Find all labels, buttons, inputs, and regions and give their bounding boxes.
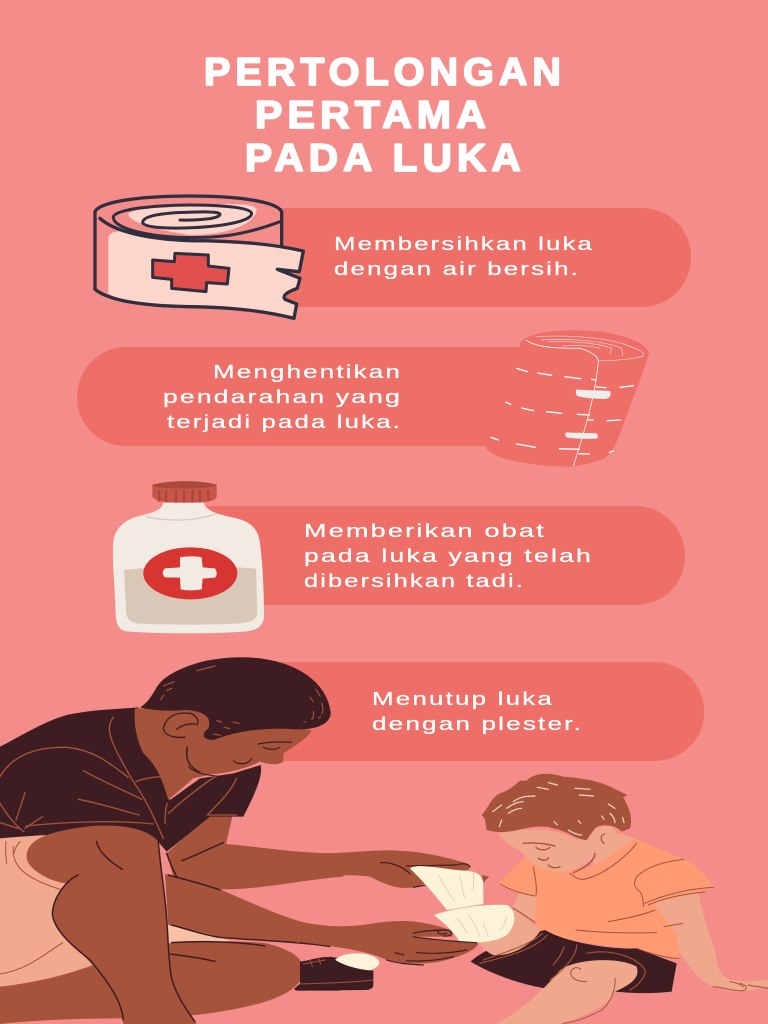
bottle cap bbox=[152, 481, 217, 503]
upper hand bbox=[297, 850, 470, 888]
hair bbox=[140, 657, 331, 740]
shoe bbox=[294, 957, 340, 991]
shorts bbox=[471, 930, 677, 993]
face bbox=[498, 826, 618, 872]
text: step 1: dengan air bersih. bbox=[334, 259, 580, 279]
panel: step 1 pill bbox=[250, 208, 691, 307]
hair and face lines bbox=[493, 783, 624, 835]
red cross badge bbox=[143, 547, 237, 599]
shoe bbox=[300, 957, 373, 991]
title: PADA LUKA bbox=[245, 137, 526, 180]
shin bbox=[0, 941, 304, 1024]
neck and face bbox=[135, 708, 312, 800]
text: step 2: Menghentikan bbox=[213, 362, 402, 382]
text: step 3: dibersihkan tadi. bbox=[304, 571, 525, 591]
lower hand bbox=[297, 921, 478, 963]
illustration: man bbox=[0, 657, 343, 1024]
title: PERTAMA bbox=[255, 94, 491, 137]
liquid bbox=[124, 566, 257, 625]
shirt bbox=[0, 707, 261, 852]
panel: step 2 pill bbox=[77, 347, 530, 446]
far arm bbox=[167, 813, 343, 889]
thigh bbox=[27, 825, 197, 1024]
near arm bbox=[165, 874, 343, 947]
text: step 4: dengan plester. bbox=[372, 714, 583, 734]
text: step 3 bbox=[304, 521, 593, 591]
text: step 2: pendarahan yang bbox=[163, 387, 402, 407]
ear and face lines bbox=[161, 666, 323, 773]
icon: bandage roll with cross bbox=[95, 196, 303, 318]
icon: elastic bandage roll bbox=[486, 330, 649, 467]
text: step 4 bbox=[372, 689, 583, 734]
sock bbox=[334, 953, 379, 972]
text: step 3: Memberikan obat bbox=[304, 521, 546, 541]
far arm of child bbox=[513, 890, 538, 923]
bottle body bbox=[113, 503, 264, 633]
illustration: child with bandaged knee bbox=[297, 774, 768, 1024]
shirt bbox=[497, 838, 713, 961]
hair bbox=[482, 774, 631, 840]
text: step 2: terjadi pada luka. bbox=[167, 412, 402, 432]
text: step 1 bbox=[334, 234, 594, 279]
text: step 2 bbox=[163, 362, 402, 432]
body outlines bbox=[52, 842, 330, 1022]
white trousers bbox=[0, 833, 100, 987]
neck bbox=[593, 833, 635, 870]
text: step 4: Menutup luka bbox=[372, 689, 554, 709]
lower leg bbox=[497, 960, 637, 1024]
shorts lines bbox=[480, 933, 645, 990]
knee and thigh bbox=[480, 908, 541, 955]
bandage wrap bbox=[410, 866, 514, 943]
shirt lines bbox=[500, 843, 713, 958]
title bbox=[204, 51, 566, 180]
panel: step 4 pill bbox=[280, 662, 704, 761]
shirt lines bbox=[0, 717, 237, 838]
title: PERTOLONGAN bbox=[204, 51, 566, 94]
text: step 1: Membersihkan luka bbox=[334, 234, 594, 254]
icon: medicine bottle bbox=[113, 481, 264, 633]
panel: step 3 pill bbox=[200, 506, 685, 605]
text: step 3: pada luka yang telah bbox=[304, 546, 593, 566]
child near arm bbox=[653, 892, 768, 992]
